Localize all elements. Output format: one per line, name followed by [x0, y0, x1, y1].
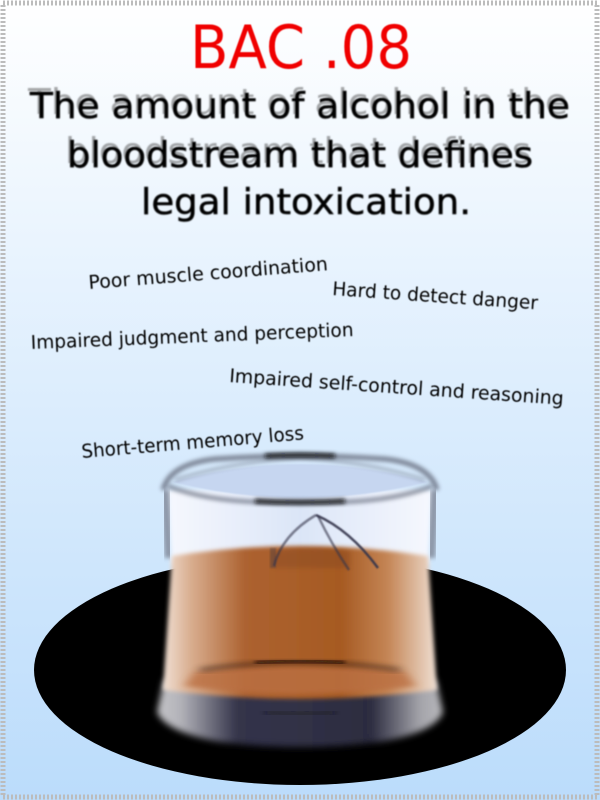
base of glass — [157, 680, 443, 747]
subtitle shadow — [27, 82, 568, 172]
liquid surface shade — [274, 548, 350, 568]
subtitle: The amount of alcohol in the — [29, 86, 570, 127]
effects list — [30, 253, 564, 463]
subtitle: bloodstream that defines — [67, 135, 533, 176]
right glass wall — [431, 490, 435, 558]
whisky glass — [157, 455, 443, 747]
dark streaks in base — [265, 712, 335, 714]
effect: self-control: Impaired self-control and reasoning — [229, 365, 564, 410]
subtitle shadow: The amount of alcohol in the — [27, 82, 568, 123]
ice cube — [273, 515, 378, 570]
effect: judgment: Impaired judgment and perception — [30, 319, 354, 354]
rim opening — [172, 464, 428, 498]
dark line in liquid — [200, 662, 400, 670]
liquid lower band — [185, 666, 415, 694]
rim dark highlights — [255, 455, 345, 502]
title: BAC .08 — [190, 13, 412, 83]
liquid — [163, 546, 437, 699]
subtitle — [27, 82, 570, 223]
effect: detect danger: Hard to detect danger — [332, 278, 539, 314]
effect: memory: Short-term memory loss — [81, 422, 305, 463]
upper glass — [168, 490, 432, 565]
subtitle shadow: bloodstream that defines — [65, 131, 531, 172]
effect: muscle coordination: Poor muscle coordination — [88, 253, 329, 294]
black ellipse surface — [34, 555, 566, 785]
subtitle: legal intoxication. — [141, 182, 471, 223]
left glass wall — [165, 490, 169, 558]
rim outline — [163, 456, 437, 490]
